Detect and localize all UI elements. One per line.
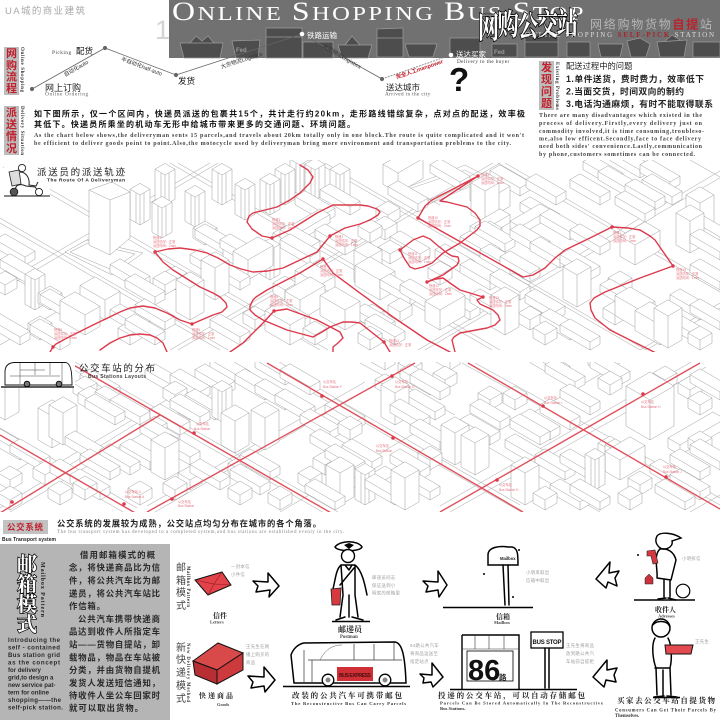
route stop markers and labels: 派送时间：1min bbox=[408, 259, 431, 264]
route stop markers and labels: 派送情况：正常 bbox=[54, 331, 76, 336]
figure: bus stop sign bbox=[531, 632, 563, 688]
route stop markers and labels: 派送时间：1min bbox=[676, 275, 699, 280]
bus station markers and labels: Bus Station A bbox=[125, 495, 145, 499]
delivery route lines bbox=[50, 165, 673, 355]
route stop markers and labels: 快递9 bbox=[481, 173, 489, 177]
envelope note: 一封本信 bbox=[231, 564, 250, 569]
small title: UA城的商业建筑 bbox=[5, 5, 85, 17]
icon: delivery scooter bbox=[4, 164, 50, 198]
route stop markers and labels: 派送情况：正常 bbox=[408, 255, 430, 260]
route stop markers and labels: 派送情况：正常 bbox=[335, 238, 357, 243]
row label: mailbox mode: 式 bbox=[176, 599, 186, 612]
english description: new service pat- bbox=[8, 682, 55, 689]
gift box pattern: Fed bbox=[236, 48, 247, 54]
figure: consumer bbox=[652, 619, 693, 698]
route stop markers and labels: 派送时间：2min bbox=[153, 243, 176, 248]
route number: 86 bbox=[468, 655, 500, 687]
bus station markers and labels: 公交车站 bbox=[395, 380, 408, 384]
chinese description: 件，将公共汽车比为邮 bbox=[69, 576, 161, 586]
caption: addressee bbox=[655, 605, 676, 618]
caption: bus stop: 投递的公交车站，可以自动存储邮包 bbox=[438, 690, 586, 701]
label box: delivery situation bbox=[4, 106, 24, 155]
problem list: 2.当面交货，时间双向的制约 bbox=[566, 86, 684, 96]
english description: Bus station grid bbox=[8, 652, 60, 659]
chinese description: 站——货物自提站，卸 bbox=[69, 640, 160, 650]
page number: 1 bbox=[155, 15, 170, 45]
heading: bus stations layouts: Bus Stations Layouts bbox=[88, 374, 146, 380]
chinese description: 发货人发送短信通知， bbox=[69, 678, 160, 688]
chinese description: 递员，将公共汽车站比 bbox=[69, 588, 161, 598]
route stop markers and labels: 派送情况：正常 bbox=[429, 287, 451, 292]
label box: online shopping flow: 程 bbox=[6, 81, 17, 95]
question mark: ? bbox=[449, 61, 469, 98]
label box: problems: 现 bbox=[541, 73, 552, 86]
heading: bus stations layouts: 公交车站的分布 bbox=[79, 362, 155, 374]
caption: letters: Letters bbox=[210, 620, 224, 624]
row label: mailbox mode: 模 bbox=[176, 587, 186, 599]
route stop markers and labels: 派送时间：3min bbox=[489, 303, 512, 308]
chinese description: 就可以取出货物。 bbox=[69, 703, 143, 713]
calligraphy title: 站 bbox=[557, 7, 578, 41]
chinese description: 念，将快递商品比为信 bbox=[69, 562, 161, 572]
route stop markers and labels: 派送时间：2min bbox=[429, 291, 452, 296]
row label: new delivery mode: 递 bbox=[176, 666, 186, 679]
english description: shopping——the bbox=[8, 697, 62, 704]
label box: problems: 发 bbox=[541, 60, 552, 74]
route stop markers and labels: 快递4 bbox=[153, 236, 161, 240]
bus station markers and labels: 公交车站 bbox=[499, 483, 512, 487]
route stop markers and labels: 派送时间：1min bbox=[192, 335, 215, 340]
chinese description: 待收件人坐公车回家时 bbox=[69, 690, 161, 700]
route stop markers and labels: 派送时间：2min bbox=[428, 223, 451, 228]
process labels: 配货 bbox=[76, 46, 94, 56]
problem list: 3.电话沟通麻烦，有时不能取得联系 bbox=[566, 98, 713, 109]
process labels: Delivery to the buyer bbox=[457, 59, 510, 65]
calligraphy title: 网 bbox=[478, 11, 499, 45]
figure: postman bbox=[331, 542, 370, 622]
english problems paragraph: process of delivery.Firstly,every delivery just on bbox=[539, 121, 703, 127]
route stop markers and labels: 派送时间：2min bbox=[320, 272, 343, 277]
label box: online shopping flow: 流 bbox=[6, 70, 17, 84]
caption: postman: Postman bbox=[340, 635, 358, 640]
route stop markers and labels: 派送情况：正常 bbox=[481, 176, 503, 181]
figure: bus shelter 86: 路 bbox=[499, 672, 507, 682]
caption: reconstructed bus bbox=[291, 690, 406, 706]
caption: reconstructed bus: 改装的公共汽车可携带邮包 bbox=[292, 690, 402, 700]
calligraphy title: 交 bbox=[537, 9, 559, 42]
bus station markers and labels: 公交车站 bbox=[544, 396, 557, 400]
route stop markers and labels: 快递13 bbox=[489, 296, 499, 300]
postman note: 明家的邮箱里 bbox=[372, 590, 400, 596]
problem list: 配送过程中的问题 bbox=[566, 61, 632, 71]
problem list bbox=[566, 61, 713, 109]
panel: online shopping process bbox=[4, 30, 510, 98]
caption: addressee: Adresses bbox=[658, 614, 675, 618]
cargo hold: BUS EXPRESS bbox=[339, 673, 372, 679]
bus station markers and labels: 公交车站 bbox=[376, 444, 389, 448]
intro chinese text: 公交系统的发展较为成熟，公交站点均匀分布在城市的各个角落。 bbox=[57, 518, 321, 528]
map: delivery route city blocks bbox=[0, 147, 720, 350]
label box: problems: 题 bbox=[541, 97, 552, 110]
caption: postman: 邮递员 bbox=[338, 624, 363, 634]
postman note: 邮递员同志 bbox=[372, 575, 395, 580]
icon: bus on map heading bbox=[0, 360, 75, 388]
english description: self-pick station. bbox=[8, 704, 63, 712]
route stop markers and labels: 快递11 bbox=[408, 252, 418, 256]
route stop markers and labels: 派送时间：2min bbox=[272, 225, 295, 230]
bus station markers and labels: Bus Station bbox=[376, 449, 393, 453]
caption: goods bbox=[199, 691, 233, 707]
icon: red parcel bbox=[193, 643, 243, 684]
route stop markers and labels: 快递5 bbox=[192, 328, 200, 332]
label box: delivery situation: 况 bbox=[6, 142, 17, 155]
bus station markers and labels: 公交车站 bbox=[178, 500, 191, 504]
postman note: 保证送到小 bbox=[372, 582, 396, 589]
route stop markers and labels: 派送时间：1min bbox=[335, 242, 358, 247]
process line bbox=[32, 34, 382, 89]
route stop markers and labels: 快递15 bbox=[676, 268, 686, 272]
label box: online shopping flow: Online Shopping bbox=[19, 47, 24, 92]
caption: consumer: Themselves. bbox=[615, 714, 639, 719]
label box: online shopping flow: 网 bbox=[6, 47, 17, 60]
caption: bus stop: Bus Stations. bbox=[440, 706, 466, 711]
problem list: 1.单件送货，费时费力，效率低下 bbox=[566, 73, 704, 84]
label box: delivery situation: 派 bbox=[6, 106, 17, 119]
english problems paragraph: by phone,customers sometimes can be connected. bbox=[539, 152, 696, 158]
route stop markers and labels: 派送情况：正常 bbox=[676, 271, 698, 276]
route stop markers and labels: 派送情况：正常 bbox=[428, 219, 450, 224]
arrow: envelope to postman bbox=[253, 573, 279, 597]
row label: mailbox mode bbox=[176, 561, 190, 612]
row label: new delivery mode: 式 bbox=[176, 692, 186, 705]
figure: addressee bbox=[634, 533, 695, 600]
label: bus system bbox=[2, 520, 57, 543]
english description: as the concept bbox=[8, 660, 60, 666]
label box: online shopping flow bbox=[4, 47, 24, 95]
mailbox note: 信箱中取出 bbox=[526, 577, 549, 584]
label box: delivery situation: 送 bbox=[6, 117, 17, 131]
label: bus system: Bus Transport system bbox=[2, 537, 57, 543]
bus station markers and labels: Bus Station bbox=[178, 504, 195, 508]
route stop markers and labels: 派送时间：2min bbox=[613, 238, 636, 243]
row label: new delivery mode: 快 bbox=[176, 654, 186, 666]
calligraphy mailbox title: 模 bbox=[17, 593, 37, 616]
bus station markers and labels: Bus Station J bbox=[663, 470, 682, 474]
route stop markers and labels: 快递7 bbox=[320, 265, 328, 269]
process labels: 半自动化half-auto bbox=[120, 55, 163, 78]
panel: delivery situation bbox=[4, 106, 525, 155]
route stop markers and labels: 派送情况：正常 bbox=[489, 299, 511, 304]
goods note: 播上购买的 bbox=[246, 651, 270, 658]
gift box pattern: Fed bbox=[494, 50, 505, 56]
manual segment bbox=[382, 55, 451, 79]
bus station markers and labels: Bus Station bbox=[194, 427, 211, 431]
stop note: 车站前自提柜 bbox=[566, 658, 594, 665]
mailbox note: 小明来取出 bbox=[526, 570, 549, 575]
header band bbox=[169, 0, 720, 58]
caption: mailbox: Mailbox bbox=[494, 620, 511, 625]
english problems paragraph: commodity involved,it is time consuming,troubleso- bbox=[539, 129, 704, 135]
panel: mailbox pattern concept bbox=[0, 544, 170, 720]
process labels: 网上订购 bbox=[45, 82, 81, 93]
panel: existing problems bbox=[539, 60, 713, 158]
process labels: 大宗物流Logistics bbox=[220, 50, 263, 71]
english subtitle: ONLINE SHOPPING SELF-PICK STATION bbox=[525, 31, 714, 39]
row label: new delivery mode: 新 bbox=[176, 641, 186, 654]
route stop markers and labels: 快递12 bbox=[429, 284, 439, 288]
route stop markers and labels bbox=[51, 172, 699, 349]
row label: mailbox mode: Mailbox Pattern bbox=[185, 566, 190, 607]
bus station markers and labels: 公交车站 bbox=[641, 400, 654, 404]
process labels: 大宗物流Logistics bbox=[321, 42, 363, 71]
english problems paragraph: me,also low efficent.Secondly,face to face delivery bbox=[539, 136, 701, 142]
heading: route of a deliveryman: The Route Of A Deliveryman bbox=[47, 178, 125, 184]
process markers bbox=[30, 32, 453, 91]
map: bus stations city blocks bbox=[0, 362, 720, 512]
route stop markers and labels: 派送情况：正常 bbox=[192, 331, 214, 336]
process labels bbox=[45, 30, 510, 98]
caption: consumer: Consumers Can Get Their Parcels By bbox=[615, 708, 717, 714]
process labels: 发货 bbox=[178, 76, 196, 86]
route stop markers and labels: 派送时间：3min bbox=[270, 302, 293, 307]
route stop markers and labels: 快递3 bbox=[272, 218, 280, 222]
route stop markers and labels: 派送情况：正常 bbox=[320, 268, 342, 273]
english description: grid,to design a bbox=[8, 674, 54, 682]
vertical english title: Mailbox Pattern bbox=[39, 562, 45, 618]
label box: delivery situation: Delivery Situation bbox=[19, 106, 24, 155]
bus route lines bbox=[0, 363, 720, 514]
bus station markers and labels: Bus Station D bbox=[395, 385, 415, 389]
chinese description: 载物品，物品在车站被 bbox=[69, 652, 161, 662]
bus station markers and labels: Bus Station I bbox=[544, 401, 562, 405]
arrow: consumer to stop bbox=[593, 660, 617, 687]
arrow: bus to stop bbox=[420, 663, 443, 687]
label: bus system: 公交系统 bbox=[7, 522, 43, 532]
process labels: Online Ordering bbox=[45, 92, 89, 98]
caption: consumer bbox=[615, 695, 717, 719]
row label: mailbox mode: 箱 bbox=[176, 574, 186, 587]
route stop markers and labels: 派送情况：正常 bbox=[153, 239, 175, 244]
bus station markers and labels: Bus Station H bbox=[641, 405, 661, 409]
heading: route of a deliveryman bbox=[37, 166, 125, 184]
row label: new delivery mode: New Delivery Method bbox=[185, 643, 190, 702]
label box: online shopping flow: 购 bbox=[6, 58, 17, 72]
route stop markers and labels: 派送时间：2min bbox=[481, 180, 504, 185]
chinese paragraph: 其低下。快递员所乘坐的机动车无形中给城市带来更多的交通问题、环境问题。 bbox=[34, 119, 355, 129]
caption: addressee: 收件人 bbox=[655, 605, 676, 614]
caption: bus stop bbox=[438, 690, 603, 711]
envelope note: 小件信 bbox=[231, 571, 245, 578]
consumer note: 王先生 bbox=[695, 638, 709, 645]
route stop markers and labels: 快递8 bbox=[270, 295, 278, 299]
english problems paragraph: need both sides' convenience.Lastly,communication bbox=[539, 144, 703, 150]
figure: mailbox bbox=[443, 547, 533, 608]
chinese description: 借用邮箱模式的概 bbox=[80, 550, 156, 560]
chinese description: 分类，并由货物自提机 bbox=[69, 665, 161, 675]
bus station markers and labels: 公交车站 bbox=[663, 465, 676, 469]
caption: bus stop: Parcels Can Be Stored Automatically In The Reconstructive bbox=[440, 700, 603, 706]
english description: for delivery bbox=[8, 667, 41, 674]
caption: postman bbox=[338, 624, 363, 640]
bus station markers and labels: Bus Station F bbox=[323, 385, 342, 389]
label box: delivery situation: 情 bbox=[6, 129, 17, 143]
bus station markers and labels: 公交车站 bbox=[323, 380, 336, 384]
row label: mailbox mode: 邮 bbox=[176, 561, 186, 574]
figure: bus shelter 86 bbox=[450, 635, 577, 690]
bus note: 将商品运送至 bbox=[410, 650, 438, 657]
english paragraph: As the chart below shows,the deliveryman sents 15 parcels,and travels about 20km totally only in one block.The route is quite complicated and it won't bbox=[34, 133, 524, 139]
goods note: 王先生在网 bbox=[246, 644, 269, 649]
caption: goods: Goods bbox=[217, 702, 230, 707]
calligraphy mailbox title: 箱 bbox=[17, 573, 37, 596]
route stop markers and labels: 快递1 bbox=[613, 231, 621, 235]
route stop markers and labels: 派送情况：正常 bbox=[613, 234, 635, 239]
main tower bbox=[89, 182, 130, 255]
label box: problems: 问 bbox=[541, 85, 552, 98]
bus station markers and labels: 公交车站 A bbox=[125, 490, 141, 494]
route stop markers and labels: 快递6 bbox=[54, 328, 62, 332]
arrow: addressee to mailbox bbox=[596, 562, 619, 588]
chinese description: 作信箱。 bbox=[69, 601, 105, 611]
caption: mailbox: 信箱 bbox=[496, 612, 510, 621]
heading: bus stations layouts bbox=[79, 362, 155, 380]
english description: Introducing the bbox=[8, 637, 61, 644]
route stop markers and labels: 快递14 bbox=[389, 339, 399, 343]
panel: bus transport system intro bbox=[2, 518, 344, 543]
intro english text: The bus transport system has developed to a completed system,and bus stations are established evenly in the city. bbox=[57, 530, 344, 535]
label box: problems bbox=[539, 60, 559, 110]
calligraphy title: 公 bbox=[518, 10, 539, 43]
calligraphy mailbox title: 式 bbox=[17, 613, 37, 636]
figure: bus stop sign: BUS STOP bbox=[532, 640, 562, 646]
bus station markers and labels: 公交车站 bbox=[196, 422, 209, 426]
bus note: 指定站点 bbox=[410, 658, 429, 665]
arrow: postman to mailbox bbox=[423, 571, 447, 597]
arrow: parcel to bus bbox=[248, 667, 275, 692]
caption: goods: 快递商品 bbox=[199, 691, 233, 700]
icon: red envelope bbox=[195, 572, 231, 595]
addressee note: 小明拆信 bbox=[682, 555, 701, 562]
row label: new delivery mode: 模 bbox=[176, 680, 186, 692]
bus station markers and labels bbox=[10, 374, 682, 508]
stop note: 放到路公共汽 bbox=[566, 650, 594, 657]
english description: self - contained bbox=[8, 644, 60, 652]
caption: reconstructed bus: The Reconstructive Bus Can Carry Parcels bbox=[291, 701, 406, 706]
label box: problems: Existing Problems bbox=[554, 62, 559, 110]
caption: consumer: 买家去公交车站自提货物 bbox=[617, 695, 716, 705]
chinese description: 公共汽车携带快递商 bbox=[78, 614, 160, 624]
bus station markers and labels: Bus Station H bbox=[499, 488, 519, 492]
figure: reconstructed bus bbox=[283, 642, 410, 686]
heading background: route bbox=[0, 158, 46, 166]
caption: letters bbox=[210, 611, 227, 624]
bus note: 94路公共汽车 bbox=[410, 643, 439, 648]
figure: mailbox: Mailbox bbox=[500, 556, 516, 561]
process labels: 送达城市 bbox=[386, 82, 421, 92]
route stop markers and labels: 快递10 bbox=[428, 216, 438, 220]
goods note: 商品 bbox=[246, 659, 256, 666]
route stop markers and labels: 派送时间：2min bbox=[54, 335, 77, 340]
chinese description: 品达到收件人所指定车 bbox=[69, 626, 160, 636]
caption: mailbox bbox=[494, 612, 511, 625]
process labels: 铁路运输 bbox=[307, 30, 337, 40]
process labels: 送达买家 bbox=[456, 49, 486, 59]
route stop markers and labels: 派送情况：正常 bbox=[272, 221, 294, 226]
process labels: Arrived in the city bbox=[385, 92, 431, 98]
calligraphy title: 购 bbox=[498, 9, 519, 42]
route stop markers and labels: 快递2 bbox=[335, 235, 343, 239]
stop note: 王先生将商品 bbox=[566, 643, 594, 648]
row label: new delivery mode bbox=[176, 641, 190, 705]
calligraphy mailbox title: 邮 bbox=[17, 553, 37, 576]
chinese subtitle: 网络购物货物自提站 bbox=[590, 16, 712, 32]
english description: tern for online bbox=[8, 690, 50, 696]
english paragraph: be efficient to deliver goods point to point.Also,the motocycle used by deliveryman bring more environment and transportation problems to the city. bbox=[34, 141, 511, 147]
english problems paragraph: There are many disadvantages which existed in the bbox=[539, 113, 702, 119]
process labels: 自动化auto bbox=[62, 58, 90, 79]
process labels: 完全人工manpower bbox=[395, 57, 445, 81]
process labels: Picking bbox=[52, 50, 72, 56]
gift box pattern bbox=[180, 28, 720, 58]
heading: route of a deliveryman: 派送员的派送轨迹 bbox=[37, 166, 125, 178]
route stop markers and labels: 派送情况：正常 bbox=[270, 298, 292, 303]
chinese paragraph: 如下图所示，仅一个区间内，快递员派送的包裹共15个，共计走行约20km，走形路线错综复杂，点对点的配送，效率极 bbox=[34, 108, 525, 118]
route stop markers and labels: 派送情况：正常 bbox=[389, 342, 411, 347]
caption: letters: 信件 bbox=[213, 611, 227, 620]
